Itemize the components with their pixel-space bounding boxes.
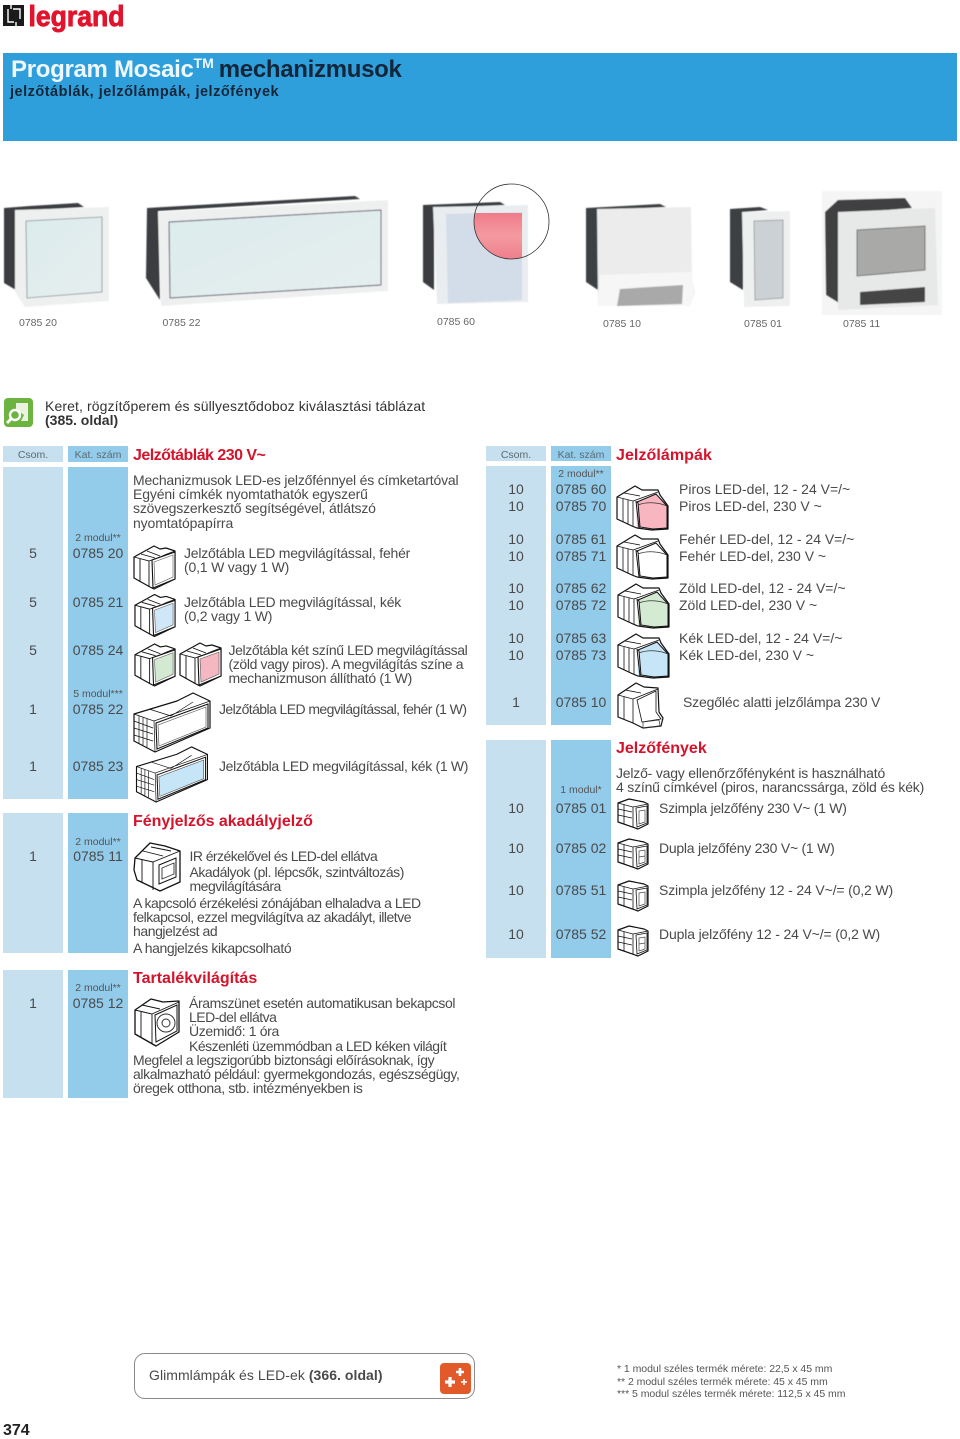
right column labels: Csom. [501,449,531,461]
photo: 0785 10 [586,204,695,306]
rows: green lamp: Zöld LED-del, 12 - 24 V=/~ [679,580,846,596]
row: 0785 12: Készenléti üzemmódban a LED kéken világít [189,1038,446,1054]
column: Csom group 1 [3,467,63,799]
row: 0785 12: 0785 12 [73,995,123,1011]
row: 0785 51: Szimpla jelzőfény 12 - 24 V~/= (0,2 W) [659,882,893,898]
icon: backup light [134,998,180,1047]
photo: 0785 60 [423,202,528,304]
heading: Fenyjelzos akadalyjelzo: Fényjelzős akadályjelző [133,813,313,830]
row: 0785 22 [29,688,466,753]
heading: Jelzotablak: Jelzőtáblák 230 V~ [133,447,265,464]
row: 0785 01: 0785 01 [556,800,606,816]
row: 0785 23 [29,746,468,803]
row: 0785 21: 0785 21 [73,594,123,610]
row: 0785 21: 5 [29,594,37,610]
row: 0785 52: Dupla jelzőfény 12 - 24 V~/= (0,2 W) [659,926,880,942]
rows: blue lamp: Kék LED-del, 12 - 24 V=/~ [679,630,842,646]
callout: Glimmlampak [134,1353,475,1399]
column: right Csom group 2 [486,740,546,958]
rows: white lamp: Fehér LED-del, 230 V ~ [679,548,826,564]
row: 0785 01 [508,798,847,830]
rows: white lamp: 10 [508,531,524,547]
row: 0785 11 [29,836,421,956]
row: 0785 12: Áramszünet esetén automatikusan bekapcsol [189,995,455,1011]
row: 0785 24: 5 [29,642,37,658]
row: 0785 52: 0785 52 [556,926,606,942]
row: 0785 21: Jelzőtábla LED megvilágítással, kék [184,594,401,610]
row: 0785 10 [512,682,880,729]
module label: 2 modul: 2 modul** [558,468,604,480]
Jelzofenyek intro text [616,765,924,795]
text: Kat. szám [558,449,604,461]
row: 0785 23: Jelzőtábla LED megvilágítással, kék (1 W) [219,758,468,774]
rows: green lamp [508,580,846,629]
footnotes: ** 2 modul széles termék mérete: 45 x 45 mm [617,1376,828,1388]
rows: white lamp: Fehér LED-del, 12 - 24 V=/~ [679,531,854,547]
column: right Kat group 2 [551,740,611,958]
rows: red lamp: 0785 70 [556,498,606,514]
row: 0785 12 [29,982,459,1096]
row: 0785 02 [508,838,834,870]
row: 0785 11: Akadályok (pl. lépcsők, szintváltozás) [190,864,404,880]
row: 0785 11: A hangjelzés kikapcsolható [133,940,291,956]
row: 0785 12: Üzemidő: 1 óra [189,1023,279,1039]
rows: green lamp: Zöld LED-del, 230 V ~ [679,597,817,613]
rows: red lamp: 10 [508,498,524,514]
intro text [133,472,458,531]
row: 0785 22: 5 modul*** [73,688,123,700]
row: 0785 01: 10 [508,800,524,816]
subtitle: jelzőtáblák, jelzőlámpák, jelzőfények [10,84,279,100]
photo: red detail circle [470,184,549,259]
cross-reference note [45,398,426,428]
rows: green lamp: 0785 62 [556,580,606,596]
photo: 0785 20 [4,203,109,307]
rows: blue lamp: 0785 63 [556,630,606,646]
column: right Kat group 1 [551,466,611,725]
cross-reference note: Keret, rögzítőperem és süllyesztődoboz kiválasztási táblázat [45,398,425,414]
row: 0785 51: 10 [508,882,524,898]
row: 0785 11: IR érzékelővel és LED-del ellátva [190,848,377,864]
intro text: Mechanizmusok LED-es jelzőfénnyel és címketartóval [133,472,458,488]
rows: blue lamp: 0785 73 [556,647,606,663]
row: 0785 22: 0785 22 [73,701,123,717]
photo captions: 0785 20 [19,317,57,329]
text: Kat. szám [75,449,121,461]
page number: 374 [3,1422,30,1439]
row: 0785 11: megvilágítására [190,878,281,894]
row: 0785 10: 1 [512,694,520,710]
photo captions: 0785 10 [603,318,641,330]
row: 0785 12: öregek otthona, stb. intézményekben is [133,1080,363,1096]
photo: 0785 22 [146,196,388,306]
column: right Csom header [486,446,546,461]
row: 0785 51 [508,880,893,912]
row: 0785 02: 0785 02 [556,840,606,856]
row: 0785 11: A kapcsoló érzékelési zónájában elhaladva a LED [133,895,421,911]
column: Csom group 3 [3,970,63,1098]
row: 0785 11: felkapcsol, ezzel megvilágítva az akadályt, illetve [133,909,411,925]
column: Kat szam header [68,446,128,462]
rows: red lamp: 10 [508,481,524,497]
row: 0785 12: 1 [29,995,37,1011]
row: 0785 20: 0785 20 [73,545,123,561]
callout: Glimmlampak: Glimmlámpák és LED-ek (366. oldal) [149,1367,383,1383]
photo captions: 0785 01 [744,318,782,330]
row: 0785 22: Jelzőtábla LED megvilágítással, fehér (1 W) [219,701,466,717]
column: Kat group 3 [68,970,128,1098]
photo captions [19,316,880,330]
rows: red lamp: Piros LED-del, 12 - 24 V=/~ [679,481,850,497]
logo: legrand: legrand [28,1,124,33]
row: 0785 10: 0785 10 [556,694,606,710]
photo captions: 0785 22 [162,317,200,329]
row: 0785 22: 1 [29,701,37,717]
heading: Tartalekvilagitas: Tartalékvilágítás [133,970,257,987]
product photos [3,184,942,314]
column labels: Csom. [18,449,48,461]
row: 0785 02: 10 [508,840,524,856]
row: 0785 12: alkalmazható például: gyermekgondozás, egészségügy, [133,1066,459,1082]
rows: white lamp: 0785 61 [556,531,606,547]
rows: green lamp: 10 [508,597,524,613]
title: Program MosaicTMmechanizmusok [11,55,402,83]
row: 0785 11: 2 modul** [75,836,121,848]
right table [486,446,611,958]
rows: green lamp: 0785 72 [556,597,606,613]
row: 0785 11: 1 [29,848,37,864]
column: Kat group 1 [68,467,128,799]
heading: Jelzolampak: Jelzőlámpák [616,447,712,464]
rows: blue lamp: 10 [508,647,524,663]
row: 0785 12: 2 modul** [75,982,121,994]
row: 0785 21: (0,2 vagy 1 W) [184,608,272,624]
icon: obstacle light [133,842,181,892]
column: right Csom group 1 [486,466,546,725]
column: Kat group 2 [68,813,128,953]
photo captions: 0785 60 [437,316,475,328]
icon: green catalogue key [4,398,33,427]
column: Csom group 2 [3,813,63,953]
row: 0785 24: (zöld vagy piros). A megvilágítás színe a [228,656,463,672]
rows: blue lamp [508,630,842,679]
row: 0785 51: 0785 51 [556,882,606,898]
row: 0785 20: Jelzőtábla LED megvilágítással, fehér [184,545,410,561]
intro text: Egyéni címkék nyomtathatók egyszerű [133,486,368,502]
row: 0785 24: 0785 24 [73,642,123,658]
row: 0785 52: 10 [508,926,524,942]
footnotes [617,1363,845,1400]
rows: green lamp: 10 [508,580,524,596]
module label: 1 modul: 1 modul* [560,784,602,796]
row: 0785 23: 0785 23 [73,758,123,774]
row: 0785 23: 1 [29,758,37,774]
row: 0785 01: Szimpla jelzőfény 230 V~ (1 W) [659,800,847,816]
intro text: szövegszerkesztő segítségével, átlátszó [133,500,376,516]
photo: 0785 01 [730,207,790,307]
row: 0785 24: mechanizmuson állítható (1 W) [228,670,412,686]
photo captions: 0785 11 [843,318,880,330]
row: 0785 02: Dupla jelzőfény 230 V~ (1 W) [659,840,834,856]
row: 0785 20: 5 [29,545,37,561]
footnotes: *** 5 modul széles termék mérete: 112,5 x 45 mm [617,1388,845,1400]
rows: white lamp: 10 [508,548,524,564]
row: 0785 20: 2 modul** [75,532,121,544]
left table [3,446,128,1098]
rows: white lamp [508,531,854,580]
row: 0785 11: hangjelzést ad [133,923,217,939]
row: 0785 10: Szegőléc alatti jelzőlámpa 230 V [683,694,880,710]
Jelzofenyek intro text: 4 színű címkével (piros, narancssárga, zöld és kék) [616,779,924,795]
photo: 0785 11 [822,191,942,315]
rows: red lamp: Piros LED-del, 230 V ~ [679,498,822,514]
icon: orange plus [440,1363,471,1394]
row: 0785 20 [29,532,410,590]
row: 0785 20: (0,1 W vagy 1 W) [184,559,289,575]
rows: blue lamp: 10 [508,630,524,646]
rows: red lamp: 0785 60 [556,481,606,497]
heading: Jelzofenyek: Jelzőfények [616,740,707,757]
Jelzofenyek intro text: Jelző- vagy ellenőrzőfényként is használható [616,765,885,781]
rows: red lamp [508,481,850,531]
rows: white lamp: 0785 71 [556,548,606,564]
row: 0785 21 [29,594,402,638]
row: 0785 12: Megfelel a legszigorúbb biztonsági előírásoknak, így [133,1052,434,1068]
intro text: nyomtatópapírra [133,515,233,531]
header banner [3,53,957,140]
row: 0785 12: LED-del ellátva [189,1009,276,1025]
row: 0785 24: Jelzőtábla két színű LED megvilágítással [228,642,467,658]
row: 0785 11: 0785 11 [73,848,123,864]
footnotes: * 1 modul széles termék mérete: 22,5 x 45 mm [617,1363,832,1375]
icon: under-skirting light [617,682,664,729]
row: 0785 52 [508,925,880,957]
column: Csom header [3,446,63,462]
row: 0785 24 [29,642,467,687]
cross-reference note: (385. oldal) [45,412,118,428]
rows: blue lamp: Kék LED-del, 230 V ~ [679,647,814,663]
column: right Kat header [551,446,611,461]
